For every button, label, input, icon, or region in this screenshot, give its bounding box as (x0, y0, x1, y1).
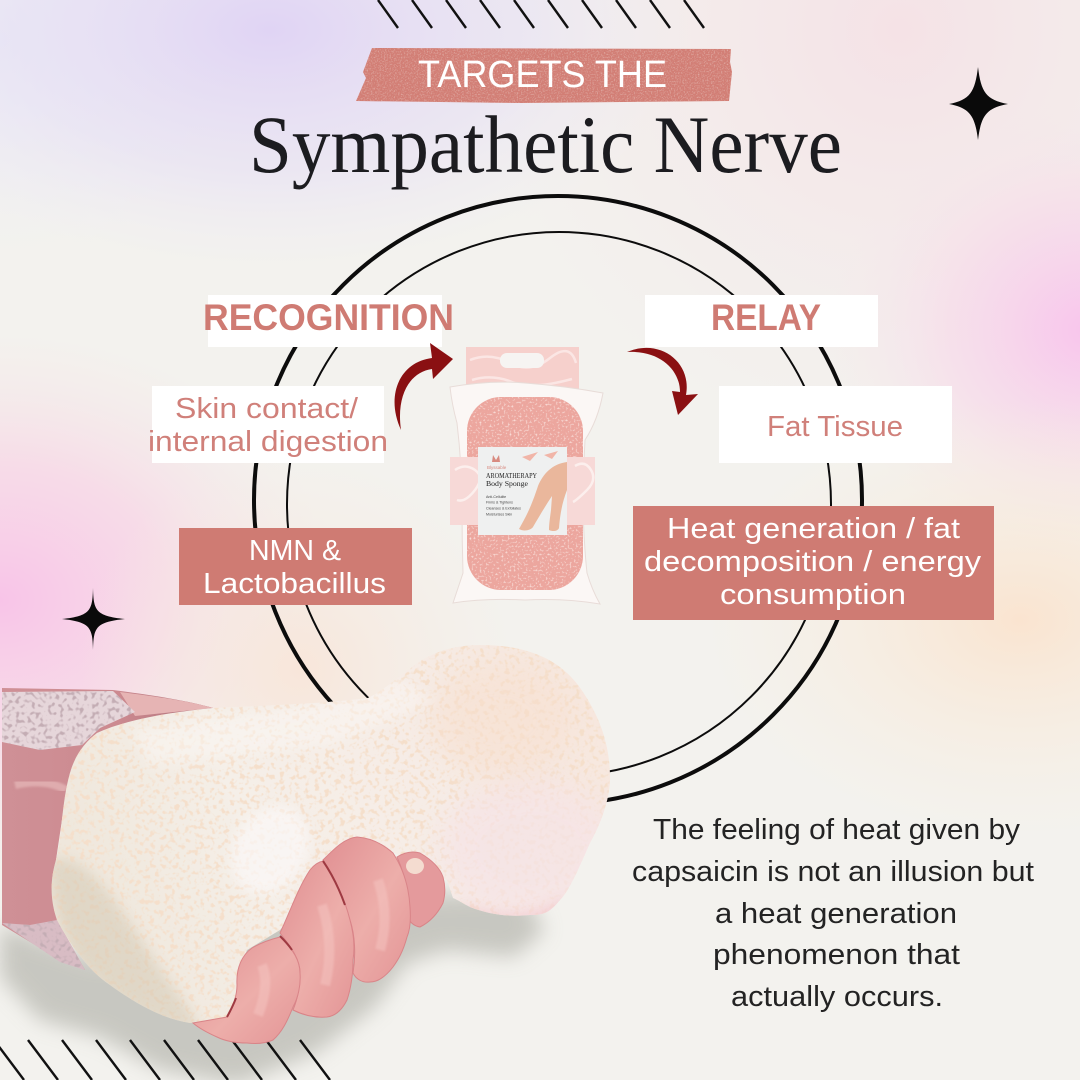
finger highlights (258, 880, 385, 1015)
panel: heat generation: consumption (720, 579, 906, 611)
panel: NMN and Lactobacillus (179, 528, 412, 605)
text block: heat explanation: The feeling of heat given by (653, 814, 1020, 846)
label card: Anti-Cellulite (486, 495, 506, 499)
panel: recognition heading: RECOGNITION (203, 297, 454, 338)
sponge tonal overlays (50, 665, 620, 1030)
top hatch lines (378, 0, 704, 28)
fingers (193, 837, 445, 1044)
panel: NMN and Lactobacillus: NMN & (249, 535, 341, 567)
panel: heat generation: Heat generation / fat (667, 513, 960, 545)
text block: heat explanation: a heat generation (715, 898, 957, 930)
clear blister pack (450, 382, 603, 604)
little finger (193, 937, 300, 1044)
text block: heat explanation (632, 814, 1034, 1013)
text block: heat explanation: phenomenon that (713, 939, 960, 971)
panel: NMN and Lactobacillus: Lactobacillus (203, 568, 386, 600)
title: Sympathetic Nerve (249, 99, 842, 190)
panel: fat tissue (719, 386, 952, 463)
arrow: left curved (395, 343, 453, 430)
text block: heat explanation: actually occurs. (731, 981, 943, 1013)
shadow under sponge (0, 890, 545, 1080)
peach upper right (435, 674, 558, 769)
package hanger card (466, 347, 579, 392)
panel: heat generation: decomposition / energy (644, 546, 982, 578)
thumb (397, 852, 445, 927)
label card: AROMATHERAPY (486, 472, 537, 480)
heading: targets the: TARGETS THE (418, 54, 667, 96)
thumb nail (406, 858, 424, 874)
band swirls (455, 464, 593, 502)
panel: skin contact: Skin contact/ (175, 393, 359, 425)
middle finger (323, 837, 410, 982)
text block: heat explanation: capsaicin is not an illusion but (632, 856, 1034, 888)
panel: fat tissue: Fat Tissue (767, 411, 903, 443)
arrow: right curved (627, 348, 698, 415)
label card: Blyssable (487, 465, 507, 470)
pink lower right (441, 780, 608, 912)
double circle (254, 196, 862, 804)
panel: heat generation (633, 506, 994, 620)
finger creases (227, 861, 345, 1017)
label card: Body Sponge (486, 480, 528, 488)
soft top highlight (130, 680, 440, 765)
label card: Firms & Tightens (486, 500, 513, 504)
wrist with foam (2, 688, 213, 970)
panel: relay heading: RELAY (711, 297, 821, 338)
label card: Cleanses & Exfoliates (486, 506, 521, 510)
panel: skin contact (148, 386, 388, 463)
grey beige lower left shade (50, 859, 200, 1030)
icon: large sparkle (949, 67, 1008, 140)
product: sponge package (450, 347, 603, 604)
panel: relay heading (645, 295, 878, 347)
bottom hatch lines (0, 1040, 330, 1080)
white highlight centre (228, 806, 312, 896)
icon: small sparkle (62, 588, 125, 650)
paper band (450, 457, 595, 525)
pink sponge (467, 397, 583, 590)
tape banner with heading (356, 48, 732, 103)
photo: hand squeezing sponge (2, 645, 620, 1044)
pink edge (467, 900, 560, 916)
ring finger (280, 861, 354, 1017)
natural sponge (52, 645, 610, 1023)
label card: Moisturizes Skin (486, 512, 512, 516)
panel: skin contact: internal digestion (148, 426, 388, 458)
label card (478, 447, 567, 535)
